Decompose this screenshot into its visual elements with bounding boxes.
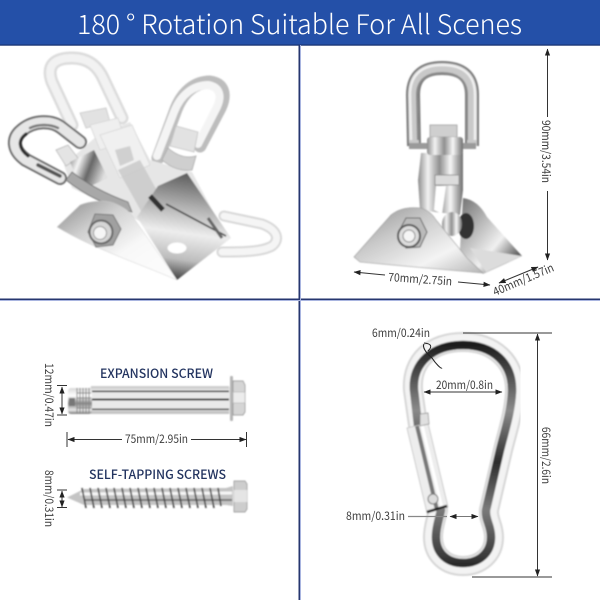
dimension: opening 8mm: 8mm/0.31in <box>346 508 405 524</box>
carabiner product <box>407 342 515 566</box>
dimension: wire 6mm: 6mm/0.24in <box>372 325 430 341</box>
dimension: opening 8mm <box>346 508 478 524</box>
dimension: diameter 8mm: 8mm/0.31in <box>41 470 57 527</box>
title: 180 ° Rotation Suitable For All Scenes <box>77 3 522 42</box>
faded top ring nut and collar <box>80 108 126 150</box>
dimension: depth 40mm: 40mm/1.57in <box>490 260 556 300</box>
faded right ring collar <box>162 126 198 170</box>
dimension: length 75mm: 75mm/2.95in <box>125 431 188 447</box>
shackle nut <box>435 175 459 185</box>
heading: expansion screw: EXPANSION SCREW <box>100 363 213 382</box>
collar <box>427 137 463 155</box>
header banner <box>0 0 600 46</box>
back plate <box>460 198 522 274</box>
panel: self-tapping screw <box>41 464 247 527</box>
dimension: height 66mm <box>463 333 554 577</box>
hex nut <box>88 214 121 247</box>
expansion screw product <box>68 376 245 421</box>
faded lower right ring <box>222 216 277 252</box>
dimension: diameter 12mm <box>41 363 67 427</box>
panel: rotation composite product <box>15 58 277 280</box>
hex nut <box>398 218 427 248</box>
self-tapping screw product <box>67 481 247 512</box>
dimension: wire 6mm <box>372 325 442 368</box>
swivel shackle <box>418 153 463 215</box>
dimension: width 70mm <box>354 269 490 289</box>
dimension: height 66mm: 66mm/2.6in <box>538 427 554 484</box>
panel: carabiner with dimensions <box>346 325 554 577</box>
dimension: width 70mm: 70mm/2.75in <box>388 269 453 289</box>
panel: expansion screw <box>41 363 246 447</box>
panel: swivel hanger with dimensions <box>354 49 556 300</box>
D ring <box>409 65 476 146</box>
mounting plate <box>57 173 231 280</box>
top bolt <box>430 125 457 137</box>
dimension: inner width 20mm: 20mm/0.8in <box>436 377 493 393</box>
dimension: height 90mm: 90mm/3.54in <box>538 120 554 183</box>
swivel base silhouette <box>64 122 215 235</box>
faded right ring <box>157 82 223 158</box>
dark left ring <box>15 122 80 178</box>
dimension: diameter 12mm: 12mm/0.47in <box>41 363 57 427</box>
dimension: length 75mm <box>67 431 246 447</box>
swivel body <box>56 125 165 218</box>
pivot pin <box>442 212 474 239</box>
front plate <box>354 208 483 273</box>
faded top ring <box>50 58 122 125</box>
heading: self-tapping screws: SELF-TAPPING SCREWS <box>89 464 226 483</box>
dimension: diameter 8mm <box>41 470 67 527</box>
carabiner gate <box>407 413 448 513</box>
swivel hanger product <box>354 65 522 274</box>
